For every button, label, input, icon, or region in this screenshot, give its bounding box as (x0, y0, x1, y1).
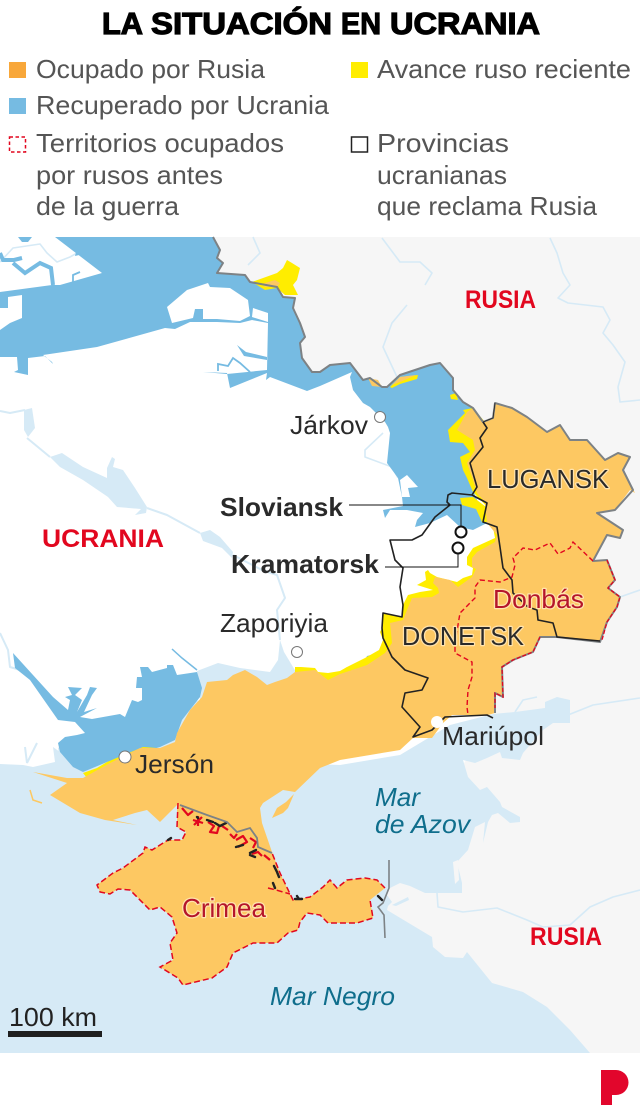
label: UCRANIA: UCRANIA (42, 525, 164, 553)
Crimea red dashed outline (97, 803, 385, 985)
occupied before the war: red dashes along Donbas (455, 542, 593, 715)
label: Mar de Azov: de Azov (375, 809, 472, 839)
Taman lagoon (392, 897, 409, 906)
label: Zaporiyia: Zaporiyia (220, 608, 329, 638)
label: LUGANSK: LUGANSK (487, 464, 610, 494)
label: Járkov: Járkov (290, 410, 368, 440)
blue inlet strip (237, 345, 267, 360)
orange patch Kharkiv border (368, 378, 382, 387)
title: LA (102, 7, 143, 41)
white island east (252, 308, 268, 322)
icon: logo P (601, 1070, 628, 1105)
Azov spit (453, 860, 459, 884)
occupied before the war: red east border (495, 560, 620, 708)
rivers (0, 237, 640, 927)
Crimea northern red fortifications (182, 808, 270, 860)
orange patch Kupiansk border (392, 375, 416, 385)
northwest rivers (0, 244, 88, 262)
yellow north salient (252, 260, 300, 295)
label: Mariúpol: Mariúpol (442, 721, 544, 751)
legend item: provinces claimed by Russia: ucranianas (377, 160, 507, 190)
yellow small (450, 393, 458, 400)
title: UCRANIA (390, 7, 540, 41)
marker: Sloviansk (456, 526, 466, 538)
Zaporizhzhia front yellow (295, 667, 347, 682)
provinces outline: Luhansk and Donetsk (382, 422, 600, 737)
legend item: provinces claimed by Russia: Provincias (377, 128, 509, 158)
Russia land (213, 237, 640, 1053)
scale bar: 100 km (9, 1002, 97, 1032)
Crimea border grey line (180, 805, 272, 853)
Dnieper reservoir upper (50, 453, 147, 515)
Russia border grey line (213, 237, 633, 713)
marker: Kherson (119, 751, 131, 763)
label: Mar de Azov: Mar (375, 782, 421, 812)
blue bay and wedge (18, 237, 32, 242)
upper lake (24, 408, 35, 437)
area recovered by Ukraine: north (0, 237, 487, 530)
blue river northwest (0, 253, 53, 285)
Kerch strait line (378, 860, 389, 938)
label: RUSIA south: RUSIA (530, 923, 602, 951)
legend item: provinces claimed by Russia (352, 128, 598, 221)
legend (9, 54, 631, 221)
occupied strip: Kinburn (30, 790, 42, 803)
occupied by Russia: main area (33, 403, 635, 985)
label: Crimea: Crimea (182, 893, 267, 923)
legend item: territories occupied before the war: de la guerra (36, 191, 180, 221)
Kramatorsk leader line (385, 554, 458, 567)
label: DONETSK: DONETSK (402, 621, 525, 651)
legend item: recovered by Ukraine: Recuperado por Ucrania (36, 90, 330, 120)
blue river to Kherson area (172, 649, 197, 670)
marker: Kharkiv (374, 412, 386, 422)
marker: Mariupol (431, 716, 443, 728)
legend item: territories occupied before the war: Territorios ocupados (36, 128, 284, 158)
title (102, 5, 540, 41)
label: Jersón: Jersón (135, 749, 214, 779)
light river lines (0, 410, 285, 763)
title: SITUACIÓN (151, 5, 332, 41)
white island centre (167, 283, 250, 323)
blue wedge (75, 245, 79, 256)
blue patch near Donetsk front (365, 654, 376, 660)
label: Mar Negro: Mar Negro (270, 981, 395, 1011)
Sloviansk leader line (349, 505, 461, 527)
title: EN (341, 7, 381, 41)
legend item: occupied by Russia: Ocupado por Rusia (36, 54, 266, 84)
yellow Kherson (83, 747, 157, 778)
marker: Kramatorsk (452, 542, 464, 554)
area recovered by Ukraine: Kherson (13, 653, 202, 772)
label: RUSIA north: RUSIA (465, 286, 536, 314)
Russian rivers (248, 237, 640, 927)
map (0, 237, 640, 1053)
yellow Kharkiv border (390, 375, 418, 388)
label: Mar de Azov (375, 782, 472, 839)
legend item: provinces claimed by Russia: que reclama Rusia (377, 191, 598, 221)
Kakhovka reservoir (58, 640, 296, 782)
Dnieper middle (200, 530, 233, 558)
label: Kramatorsk: Kramatorsk (231, 549, 380, 579)
blue inlets (73, 272, 250, 372)
Kharkiv river (365, 433, 398, 478)
legend item: territories occupied before the war (10, 128, 284, 221)
legend item: territories occupied before the war: por rusos antes (36, 160, 223, 190)
provinces outline: Luhansk top (483, 403, 495, 422)
label: Donbás: Donbás (493, 584, 584, 614)
legend item: recent Russian advance: Avance ruso reciente (377, 54, 631, 84)
Crimea black fortifications (168, 817, 382, 900)
yellow Luhansk front (448, 408, 490, 525)
recent advance: yellow (83, 260, 500, 778)
orange patch north (262, 280, 280, 287)
label: Sloviansk: Sloviansk (220, 492, 344, 522)
yellow Donetsk front (340, 497, 500, 685)
sea (0, 697, 590, 1053)
marker: Zaporizhzhia (292, 646, 302, 658)
white island near Kharkiv front (400, 475, 418, 497)
occupied strip: Arabat (272, 794, 294, 818)
